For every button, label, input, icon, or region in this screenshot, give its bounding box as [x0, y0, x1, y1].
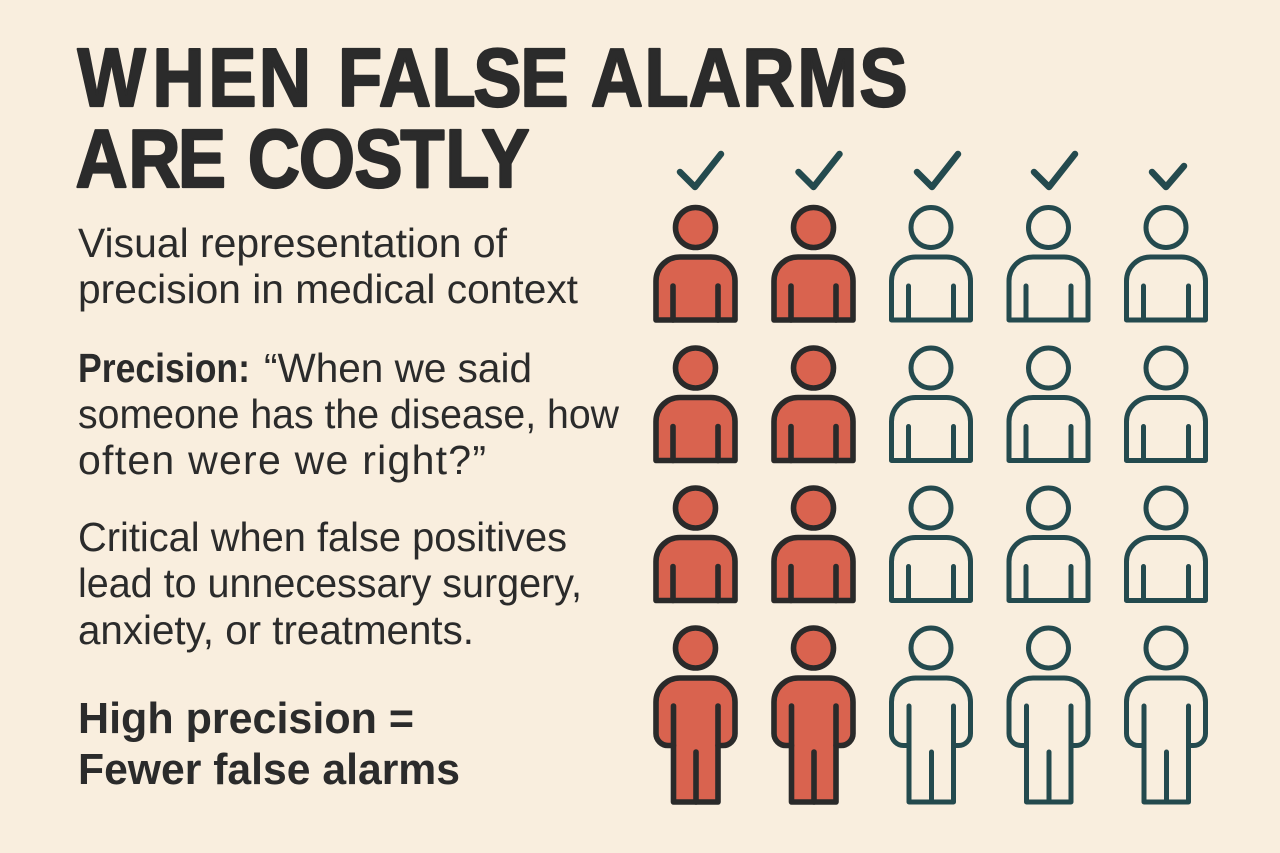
- person outline 1-4: [1009, 208, 1088, 320]
- takeaway: High precision =: [78, 694, 414, 743]
- title: ARE COSTLY: [75, 113, 530, 205]
- false positives explanation: anxiety, or treatments.: [78, 607, 474, 653]
- person red 3-2: [774, 488, 853, 600]
- person outline 2-4: [1009, 348, 1088, 460]
- person outline 1-3: [892, 208, 970, 320]
- icon: check 5: [1152, 166, 1184, 187]
- false positives explanation: [78, 514, 582, 653]
- precision definition: [78, 345, 619, 483]
- precision definition: often were we right?”: [78, 437, 486, 483]
- icon: check 1: [680, 154, 721, 187]
- icon: check 3: [917, 154, 958, 187]
- precision definition: someone has the disease, how: [78, 391, 619, 437]
- pictogram row 3: [656, 488, 1206, 600]
- takeaway: [78, 694, 460, 794]
- pictogram row 1: [656, 208, 1206, 320]
- person outline 4-3: [892, 628, 970, 802]
- person red 4-2: [774, 628, 853, 802]
- false positives explanation: lead to unnecessary surgery,: [78, 560, 582, 606]
- person outline 3-3: [892, 488, 970, 600]
- checkmarks row: [680, 154, 1184, 187]
- pictogram row 4: [656, 628, 1206, 802]
- person red 3-1: [656, 488, 735, 600]
- pictogram row 2: [656, 348, 1206, 460]
- person outline 2-5: [1126, 348, 1206, 460]
- person outline 4-4: [1009, 628, 1088, 802]
- false positives explanation: Critical when false positives: [78, 514, 567, 560]
- person outline 3-5: [1126, 488, 1206, 600]
- takeaway: Fewer false alarms: [78, 745, 460, 794]
- person red 1-1: [656, 208, 735, 320]
- subtitle: Visual representation of: [78, 220, 508, 266]
- title: [75, 32, 908, 205]
- precision definition: Precision:: [78, 345, 250, 391]
- precision definition: “When we said: [264, 345, 532, 391]
- person outline 4-5: [1126, 628, 1206, 802]
- subtitle: [78, 220, 579, 312]
- person outline 2-3: [892, 348, 970, 460]
- person red 2-2: [774, 348, 853, 460]
- subtitle: precision in medical context: [78, 266, 579, 312]
- person red 2-1: [656, 348, 735, 460]
- person outline 1-5: [1126, 208, 1206, 320]
- icon: check 4: [1034, 154, 1075, 187]
- icon: check 2: [798, 154, 840, 187]
- person red 4-1: [656, 628, 735, 802]
- person red 1-2: [774, 208, 853, 320]
- title: WHEN FALSE ALARMS: [77, 32, 908, 124]
- person outline 3-4: [1009, 488, 1088, 600]
